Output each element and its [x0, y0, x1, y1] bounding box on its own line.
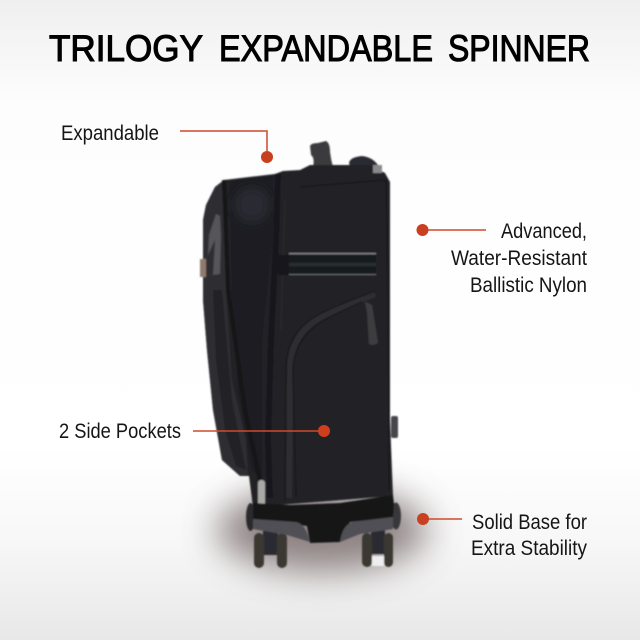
label: Water-Resistant	[451, 247, 587, 270]
marker dot	[261, 151, 273, 163]
leader line	[423, 518, 462, 520]
main panel	[280, 180, 388, 503]
callout: solid base	[417, 511, 587, 560]
icon: top handle	[310, 141, 333, 167]
icon: lower zipper pull	[258, 480, 265, 507]
wheels	[246, 502, 401, 568]
base	[253, 495, 394, 543]
marker dot	[417, 513, 429, 525]
base trim left	[253, 519, 310, 542]
label: Expandable	[61, 122, 159, 145]
icon: front zipper pull	[200, 214, 221, 277]
label: Solid Base for	[472, 511, 587, 534]
side strap	[278, 253, 376, 275]
floor shadow	[216, 488, 428, 572]
label: 2 Side Pockets	[59, 420, 181, 443]
expandable gusset	[230, 176, 273, 480]
title: TRILOGY	[49, 27, 203, 69]
marker dot	[416, 224, 428, 236]
suitcase body	[203, 165, 393, 507]
pocket seam lines	[285, 180, 389, 500]
title	[49, 27, 590, 69]
zip seam	[224, 180, 262, 490]
vertical strap highlight	[281, 200, 285, 330]
pocket zip strip	[289, 294, 375, 498]
label	[451, 220, 587, 297]
callout: expandable	[61, 122, 273, 163]
icon: top clasp	[373, 165, 382, 173]
label: Ballistic Nylon	[470, 274, 587, 297]
title: EXPANDABLE	[219, 27, 433, 69]
vertical strap seam	[268, 174, 278, 498]
callout: side pockets	[59, 420, 330, 443]
icon: rear top grip	[349, 156, 378, 172]
base trim right	[340, 517, 393, 542]
icon: pocket zipper pull	[365, 302, 378, 345]
front panel	[203, 180, 248, 476]
label	[471, 511, 587, 560]
leader line	[180, 131, 267, 157]
marker dot	[318, 425, 330, 437]
leader line	[193, 430, 324, 432]
icon: side clasp	[391, 416, 398, 438]
title: SPINNER	[448, 27, 590, 69]
label: Extra Stability	[471, 537, 587, 560]
suitcase product illustration	[200, 141, 401, 568]
leader line	[422, 229, 486, 231]
callout: ballistic nylon	[416, 220, 587, 297]
label: Advanced,	[501, 220, 587, 243]
gusset wrinkles	[234, 187, 270, 223]
front panel inner lobe	[213, 290, 246, 470]
